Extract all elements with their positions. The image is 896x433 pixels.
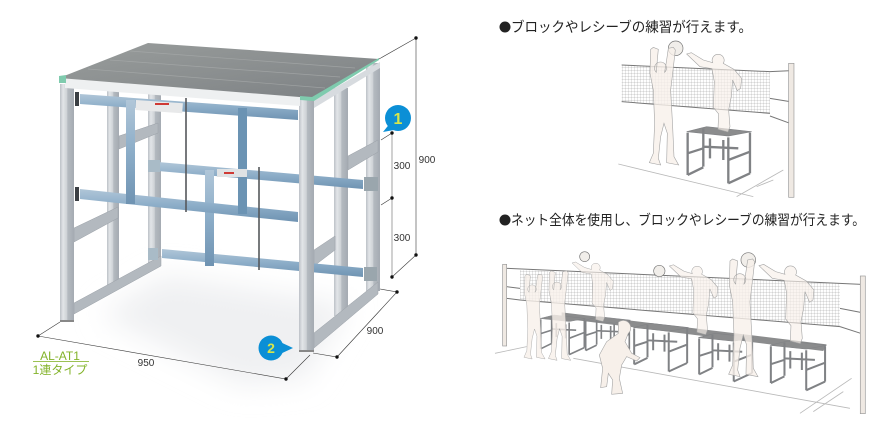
back right posts — [334, 63, 380, 316]
dimension labels: 900 — [419, 155, 436, 166]
net — [622, 65, 792, 123]
court lines — [495, 347, 852, 413]
blocker figure — [649, 47, 679, 165]
vertical rods — [186, 98, 259, 270]
heading: block and receive: ブロックやレシーブの練習が行えます。 — [511, 19, 752, 35]
attacker figure — [687, 53, 742, 132]
platform underside — [314, 62, 380, 108]
callout 1: 1 — [394, 111, 403, 128]
heading: whole net: ネット全体を使用し、ブロックやレシーブの練習が行えます。 — [511, 212, 865, 228]
illustration: single platform — [618, 41, 794, 197]
latch brackets and labels — [75, 92, 378, 281]
blockers — [524, 259, 758, 377]
illustration: whole net — [495, 252, 865, 414]
receiver figure — [599, 320, 640, 394]
callout 1 — [383, 105, 411, 132]
platform deck — [59, 43, 379, 98]
model label: AL-AT1 — [40, 349, 80, 363]
height dimension bar — [391, 133, 393, 277]
green deck edges — [59, 58, 379, 101]
platform drawings — [540, 315, 827, 390]
right front leg — [299, 100, 314, 352]
pole — [789, 63, 794, 197]
dimension labels: 300 — [394, 233, 411, 244]
front blue bars — [80, 94, 298, 222]
model label — [33, 349, 89, 377]
dimension labels: 300 — [394, 161, 411, 172]
right pole — [860, 276, 865, 414]
platform front face — [65, 78, 300, 106]
floor shadow — [100, 275, 350, 385]
dimension end points — [36, 36, 418, 381]
dimension labels — [138, 155, 436, 369]
ball — [668, 41, 683, 56]
callout 2: 2 — [267, 340, 275, 356]
left pole — [503, 264, 507, 346]
callout 2 — [258, 336, 293, 360]
court lines — [618, 164, 783, 197]
attackers — [572, 262, 814, 344]
left front leg — [60, 84, 74, 322]
dimension lines — [38, 38, 416, 379]
back left posts — [107, 85, 161, 289]
product: aluminium training platform — [59, 43, 380, 352]
net — [507, 268, 862, 333]
platform drawing — [687, 127, 752, 183]
bench tops — [562, 312, 827, 351]
dimension labels: 900 — [367, 326, 384, 337]
side braces — [74, 123, 378, 348]
back blue bars — [158, 162, 363, 277]
model label: 1連タイプ — [33, 363, 87, 377]
dimension labels: 950 — [138, 358, 155, 369]
balls — [580, 252, 756, 277]
